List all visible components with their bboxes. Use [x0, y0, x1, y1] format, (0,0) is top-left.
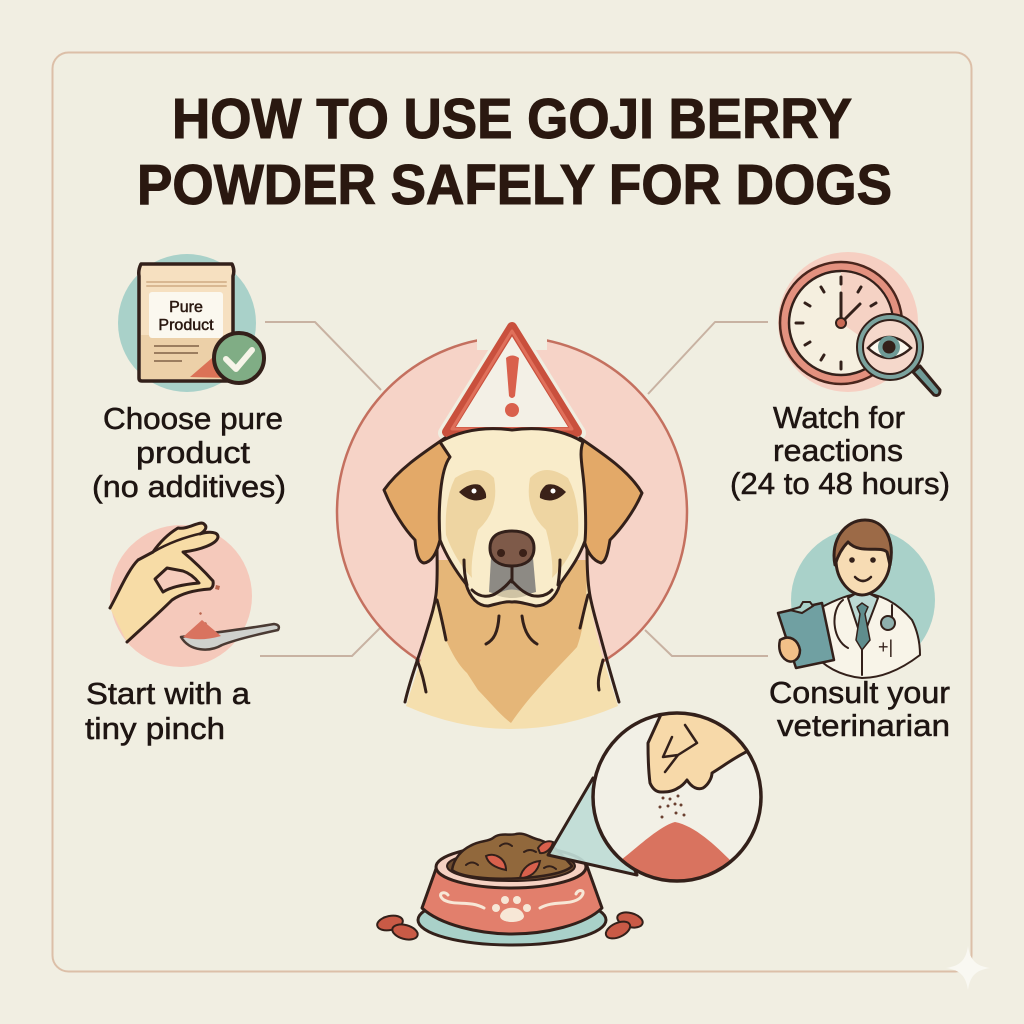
magnifier cone — [548, 778, 637, 875]
text: choose pure product: product — [136, 435, 250, 470]
dog mouth — [464, 560, 560, 596]
text: start with a tiny pinch — [85, 676, 251, 746]
icon: pure product bag — [118, 254, 264, 392]
check badge — [214, 333, 264, 383]
text: start with a tiny pinch: Start with a — [86, 676, 251, 711]
sprinkling hand — [646, 714, 747, 794]
powder particles — [658, 794, 686, 818]
spoon — [181, 624, 279, 650]
title: POWDER SAFELY FOR DOGS — [137, 153, 892, 217]
dog ears — [384, 438, 452, 563]
connector lines — [260, 322, 768, 656]
dog head — [439, 429, 586, 606]
bag label text — [158, 299, 214, 334]
pink circle backdrop — [337, 337, 687, 687]
icon: veterinarian: +| — [878, 637, 893, 657]
vet coat — [810, 593, 920, 678]
title: HOW TO USE GOJI BERRY — [172, 87, 852, 151]
scattered goji berries — [376, 910, 644, 942]
text: choose pure product — [92, 401, 286, 504]
bowl decoration paw and swirls — [441, 891, 583, 922]
bowl base — [418, 895, 606, 945]
powder pile — [622, 822, 730, 880]
text: choose pure product: (no additives) — [92, 469, 286, 504]
bag label text: Product — [158, 317, 214, 334]
text: consult your veterinarian: Consult your — [769, 675, 950, 710]
magnifier — [857, 314, 940, 395]
text: consult your veterinarian — [769, 675, 950, 743]
text: watch for reactions — [730, 400, 950, 501]
bowl food — [452, 834, 572, 879]
sparkle watermark — [946, 946, 990, 990]
goji berries in food — [486, 841, 553, 878]
text: watch for reactions: reactions — [773, 433, 903, 468]
central dog illustration with warning sign — [337, 325, 687, 729]
icon: hand pinching powder over spoon — [110, 523, 279, 667]
text: consult your veterinarian: veterinarian — [777, 708, 950, 743]
clipboard — [778, 603, 834, 668]
bowl body — [422, 866, 602, 934]
dog nose — [490, 531, 534, 566]
vet head — [836, 530, 890, 595]
title — [137, 87, 892, 217]
magnifier circle — [593, 713, 761, 881]
icon: veterinarian — [778, 520, 935, 678]
text: start with a tiny pinch: tiny pinch — [85, 711, 225, 746]
food bowl with goji berries — [376, 834, 644, 945]
dog eyes — [459, 484, 566, 500]
dog body — [406, 560, 618, 729]
warning triangle — [445, 325, 579, 433]
text: watch for reactions: Watch for — [773, 400, 905, 435]
text: watch for reactions: (24 to 48 hours) — [730, 466, 950, 501]
icon: clock with magnifier eye — [778, 252, 940, 395]
bag label text: Pure — [169, 299, 203, 316]
dog muzzle — [489, 558, 536, 596]
text: choose pure product: Choose pure — [103, 401, 283, 436]
magnified inset: hand sprinkling powder — [546, 711, 763, 883]
